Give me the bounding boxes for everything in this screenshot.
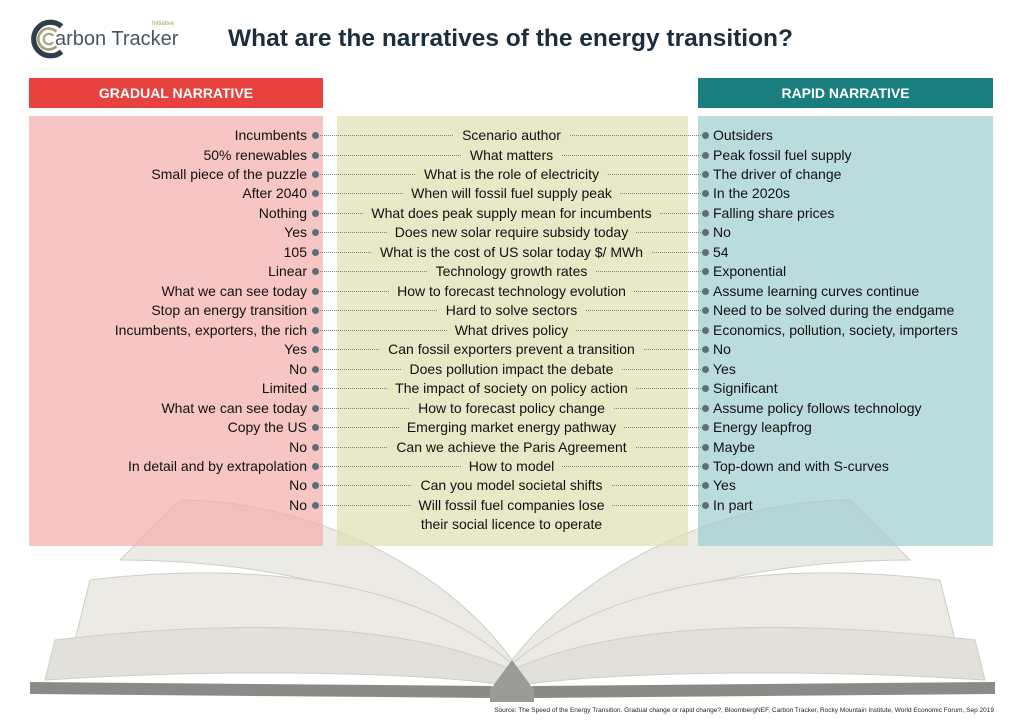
book illustration [30, 500, 995, 702]
comparison rows: Assume learning curves continue [713, 283, 919, 299]
header: gradual narrative [29, 78, 323, 108]
comparison rows: Top-down and with S-curves [713, 458, 889, 474]
comparison rows: Can fossil exporters prevent a transition [388, 341, 635, 357]
header: gradual narrative: GRADUAL NARRATIVE [99, 85, 253, 101]
comparison rows: How to forecast policy change [418, 400, 605, 416]
comparison rows: What matters [470, 146, 553, 162]
comparison rows: 105 [284, 244, 307, 260]
comparison rows: In the 2020s [713, 185, 790, 201]
comparison rows: After 2040 [242, 185, 307, 201]
comparison rows: Assume policy follows technology [713, 400, 922, 416]
comparison rows: No [713, 341, 731, 357]
comparison rows: In part [713, 497, 753, 513]
comparison rows: What drives policy [455, 322, 568, 338]
comparison rows: Incumbents [235, 127, 307, 143]
comparison rows: Small piece of the puzzle [151, 166, 307, 182]
comparison rows: What is the role of electricity [424, 166, 599, 182]
comparison rows: What does peak supply mean for incumbents [371, 205, 652, 221]
comparison rows: What we can see today [161, 400, 307, 416]
comparison rows: 54 [713, 244, 729, 260]
comparison rows: No [289, 361, 307, 377]
comparison rows: Economics, pollution, society, importers [713, 322, 958, 338]
comparison rows: Limited [262, 380, 307, 396]
header: rapid narrative: RAPID NARRATIVE [781, 85, 910, 101]
comparison rows: In detail and by extrapolation [128, 458, 307, 474]
comparison rows: The impact of society on policy action [395, 380, 628, 396]
comparison rows: Stop an energy transition [151, 302, 307, 318]
comparison rows: Scenario author [462, 127, 561, 143]
comparison rows: 50% renewables [203, 146, 307, 162]
comparison rows: Yes [284, 341, 307, 357]
comparison rows: Outsiders [713, 127, 773, 143]
comparison rows: No [289, 477, 307, 493]
comparison rows: Linear [268, 263, 307, 279]
comparison rows: Emerging market energy pathway [407, 419, 616, 435]
comparison rows: Maybe [713, 438, 755, 454]
comparison rows: Yes [713, 361, 736, 377]
source note: Source: The Speed of the Energy Transition. Gradual change or rapid change?, BloombergNEF, Carbon Tracker, Rocky Mountain Institute, World Economic Forum, Sep 2019 [494, 707, 994, 714]
comparison rows: Peak fossil fuel supply [713, 146, 852, 162]
comparison rows: Yes [284, 224, 307, 240]
comparison rows [115, 127, 958, 532]
panel: rapid [698, 116, 993, 546]
header: rapid narrative [698, 78, 993, 108]
comparison rows: their social licence to operate [421, 516, 602, 532]
logo [31, 20, 178, 58]
comparison rows: Does pollution impact the debate [410, 361, 613, 377]
comparison rows: Will fossil fuel companies lose [419, 497, 604, 513]
logo: arbon Tracker [55, 28, 178, 50]
comparison rows: Does new solar require subsidy today [395, 224, 628, 240]
comparison rows: Nothing [259, 205, 307, 221]
comparison rows: Can you model societal shifts [420, 477, 603, 493]
comparison rows: Yes [713, 477, 736, 493]
comparison rows: What is the cost of US solar today $/ MWh [380, 244, 643, 260]
comparison rows: What we can see today [161, 283, 307, 299]
comparison rows: Significant [713, 380, 778, 396]
comparison rows: The driver of change [713, 166, 841, 182]
panel: questions [337, 116, 688, 546]
comparison rows: Technology growth rates [436, 263, 587, 279]
comparison rows: No [289, 438, 307, 454]
comparison rows: How to model [469, 458, 554, 474]
comparison rows: When will fossil fuel supply peak [411, 185, 612, 201]
logo: Initiative [152, 21, 174, 27]
comparison rows: How to forecast technology evolution [397, 283, 626, 299]
comparison rows: Can we achieve the Paris Agreement [396, 438, 627, 454]
comparison rows: Falling share prices [713, 205, 834, 221]
comparison rows: Need to be solved during the endgame [713, 302, 954, 318]
title: What are the narratives of the energy transition? [228, 25, 793, 52]
comparison rows: Incumbents, exporters, the rich [115, 322, 307, 338]
comparison rows: No [713, 224, 731, 240]
comparison rows: Copy the US [228, 419, 307, 435]
comparison rows: Hard to solve sectors [446, 302, 577, 318]
comparison rows: Exponential [713, 263, 786, 279]
comparison rows: Energy leapfrog [713, 419, 812, 435]
comparison rows: No [289, 497, 307, 513]
panel: gradual [29, 116, 323, 546]
